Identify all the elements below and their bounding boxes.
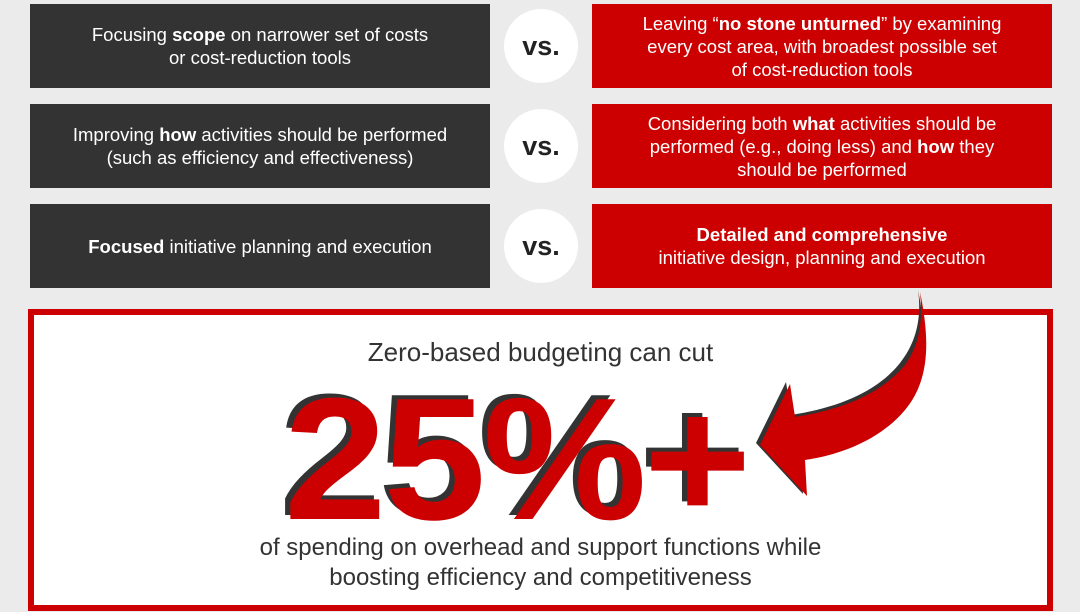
lead text: Zero-based budgeting can cut (368, 337, 713, 367)
row 3 right (592, 204, 1052, 288)
vs 3: vs. (522, 230, 560, 260)
row 3 left: Focused initiative planning and execution (88, 236, 432, 256)
bottom text: boosting efficiency and competitiveness (329, 564, 752, 591)
bottom text: of spending on overhead and support functions while (260, 534, 821, 561)
row 1 right (592, 4, 1052, 88)
row 1 left: Focusing scope on narrower set of costs (92, 24, 428, 45)
row 2 left (30, 104, 490, 188)
row 1 left: or cost-reduction tools (169, 47, 351, 68)
row 2 right: performed (e.g., doing less) and how they (650, 136, 994, 156)
row 2 right: should be performed (737, 158, 907, 180)
vs 1: vs. (522, 30, 560, 60)
vs 3 (504, 209, 578, 283)
row 1 right: every cost area, with broadest possible set (647, 36, 997, 56)
row 2 left: (such as efficiency and effectiveness) (107, 147, 413, 168)
panel: result (28, 309, 1053, 611)
row 2 right: Considering both what activities should be (648, 112, 996, 134)
row 1 right: Leaving “no stone unturned” by examining (643, 12, 1001, 34)
row 1 right: of cost-reduction tools (732, 58, 912, 80)
row 3 right: Detailed and comprehensive (697, 224, 947, 245)
row 1 left (30, 4, 490, 88)
row 3 right: initiative design, planning and execution (658, 247, 986, 268)
row 2 right (592, 104, 1052, 188)
row 2 left: Improving how activities should be performed (73, 124, 447, 145)
vs 2 (504, 109, 578, 183)
vs 1 (504, 9, 578, 83)
big number: 25%+ (284, 361, 748, 556)
bottom text (260, 534, 821, 591)
vs 2: vs. (522, 130, 560, 160)
row 3 left (30, 204, 490, 288)
